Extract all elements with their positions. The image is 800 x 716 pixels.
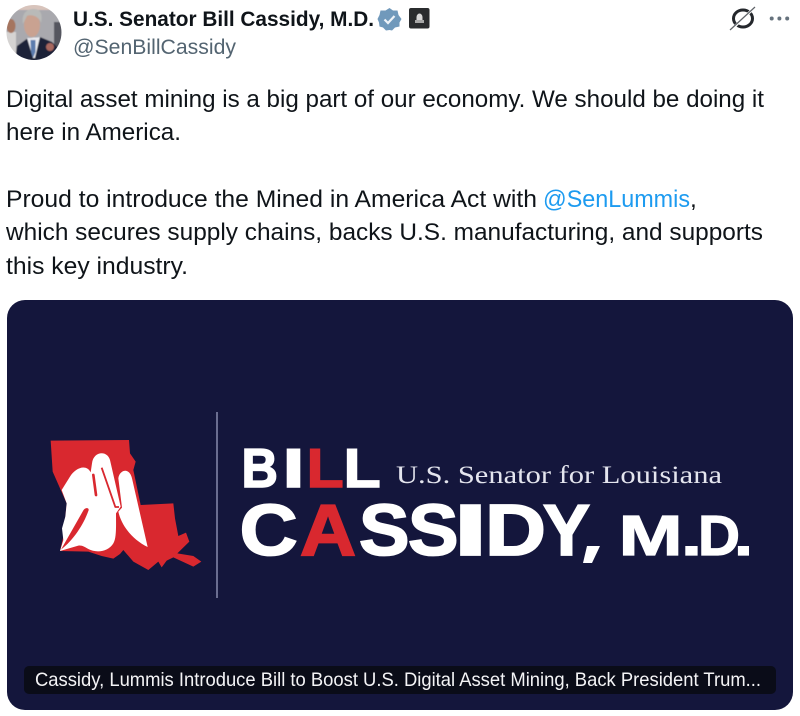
avatar bbox=[6, 5, 62, 60]
pelican body and head bbox=[60, 453, 121, 551]
pelican bill line bbox=[102, 468, 119, 507]
wordmark: Bill: B bbox=[242, 437, 278, 499]
wordmark: Cassidy: Y bbox=[543, 491, 590, 571]
tweet text: @SenLummis bbox=[543, 186, 690, 213]
wordmark: comma bbox=[583, 546, 600, 563]
pelican bill bbox=[118, 471, 148, 547]
wordmark: Cassidy: A bbox=[300, 491, 356, 571]
wordmark: Cassidy: S bbox=[359, 491, 410, 571]
wordmark: Bill: L bbox=[307, 437, 344, 499]
caption bar: Cassidy, Lummis Introduce Bill to Boost U.S. Digital Asset Mining, Back President Trum... bbox=[35, 669, 761, 691]
wordmark: Bill: L bbox=[344, 437, 381, 499]
author name: U.S. Senator Bill Cassidy, M.D. bbox=[73, 8, 374, 31]
icon: verified badge bbox=[378, 8, 402, 30]
tweet text: Proud to introduce the Mined in America Act with bbox=[6, 186, 537, 213]
wordmark: M.D.: . bbox=[681, 504, 702, 568]
wordmark: M.D.: M bbox=[619, 504, 683, 568]
icon: government capitol label bbox=[409, 8, 430, 28]
icon: more menu dots bbox=[770, 16, 789, 20]
logo: Louisiana pelican bbox=[51, 440, 201, 570]
image card bbox=[7, 300, 793, 710]
wordmark: Cassidy: D bbox=[485, 491, 546, 571]
tweet text: , bbox=[690, 186, 697, 213]
author handle: @SenBillCassidy bbox=[73, 36, 236, 59]
wordmark: Cassidy: I bbox=[454, 491, 488, 571]
wordmark: Bill bbox=[242, 437, 381, 499]
wordmark: Bill: I bbox=[282, 437, 304, 499]
tweet text: here in America. bbox=[6, 119, 181, 146]
divider bbox=[216, 412, 218, 598]
subtitle: U.S. Senator for Louisiana bbox=[396, 462, 722, 489]
tweet text: this key industry. bbox=[6, 253, 188, 280]
wordmark: M.D. bbox=[619, 504, 753, 568]
pelican figure bbox=[60, 453, 148, 551]
wordmark: Cassidy: C bbox=[240, 491, 298, 571]
wordmark: M.D.: D bbox=[698, 504, 740, 568]
tweet text bbox=[5, 86, 764, 280]
wordmark: M.D.: . bbox=[734, 504, 753, 568]
Louisiana state shape bbox=[51, 440, 201, 570]
pelican neck line bbox=[93, 475, 96, 495]
pelican wing line bbox=[61, 508, 89, 550]
tweet text: Digital asset mining is a big part of our economy. We should be doing it bbox=[6, 86, 764, 113]
wordmark: Cassidy bbox=[240, 491, 590, 571]
tweet text: which secures supply chains, backs U.S. manufacturing, and supports bbox=[5, 219, 763, 246]
wordmark: Cassidy: S bbox=[408, 491, 458, 571]
icon: grok slashed circle bbox=[730, 7, 755, 30]
